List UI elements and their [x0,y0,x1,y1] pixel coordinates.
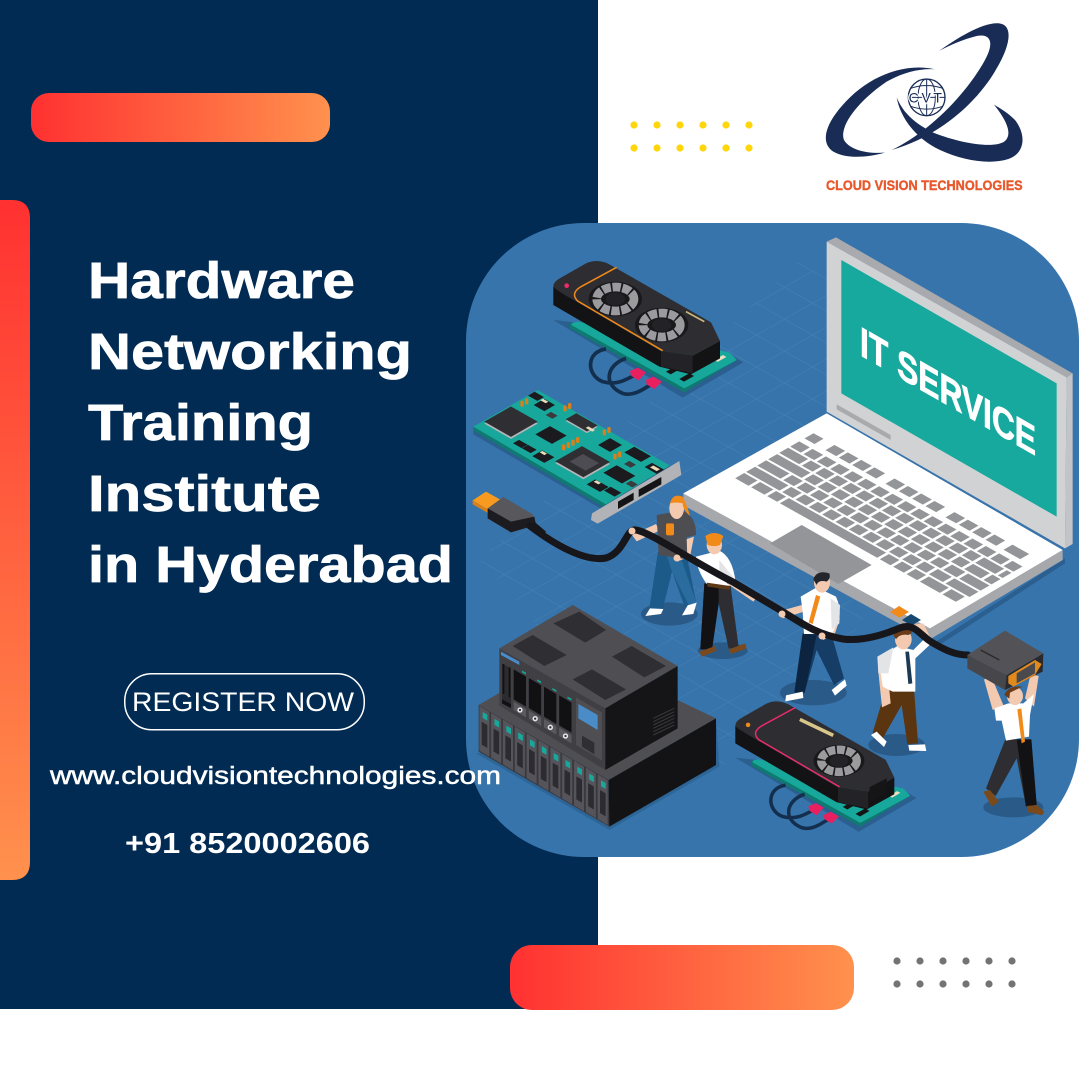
left gradient bar [0,200,30,880]
top gradient pill [31,93,330,142]
network circuit card [473,390,681,524]
title: Networking [88,323,412,380]
person: lifting connector [983,674,1044,817]
VGA connector [967,631,1043,690]
laptop screen [827,237,1073,377]
server rack [476,605,719,830]
graphics card top [553,261,743,398]
person: orange hair, white shirt [696,533,757,659]
graphics card bottom [735,701,917,832]
fans [589,282,688,342]
logo swooshes [826,23,1023,162]
network cable [530,526,968,655]
illustration panel: IT service hardware scene [466,223,1079,857]
card housing [553,287,720,374]
logo globe: CVT [909,89,945,105]
person: grey t-shirt [632,496,698,626]
cable plug [473,492,546,538]
laptop [683,237,1073,647]
yellow dot grid [630,121,753,152]
navy background panel [0,0,598,1009]
logo globe [908,79,945,116]
card bracket and ports [591,461,681,524]
logo wordmark: CLOUD VISION TECHNOLOGIES [826,178,1023,193]
keyboard [740,436,1032,601]
title: Hardware [88,252,355,309]
title [88,252,453,593]
phone number: +91 8520002606 [125,828,370,860]
card chips [484,392,664,497]
bottom gradient pill [510,945,854,1010]
upper server unit [499,605,678,708]
person: dark hair, orange tie [778,572,847,705]
hands on cable [628,528,826,640]
laptop sticker squares [890,606,921,626]
register now button [125,674,364,730]
laptop base [683,413,1063,641]
title: Institute [88,465,321,522]
title: Training [88,394,313,451]
logo: Cloud Vision Technologies [826,23,1023,193]
touchpad [770,525,872,584]
person: brown trousers [868,623,931,756]
title: in Hyderabad [88,536,453,593]
bottom card housing [735,726,894,809]
register now button: REGISTER NOW [132,687,355,717]
bottom card cables [771,785,830,828]
lower server unit [479,650,716,780]
power cables [591,349,653,394]
website url: www.cloudvisiontechnologies.com [49,762,501,790]
grey dot grid [893,957,1016,988]
